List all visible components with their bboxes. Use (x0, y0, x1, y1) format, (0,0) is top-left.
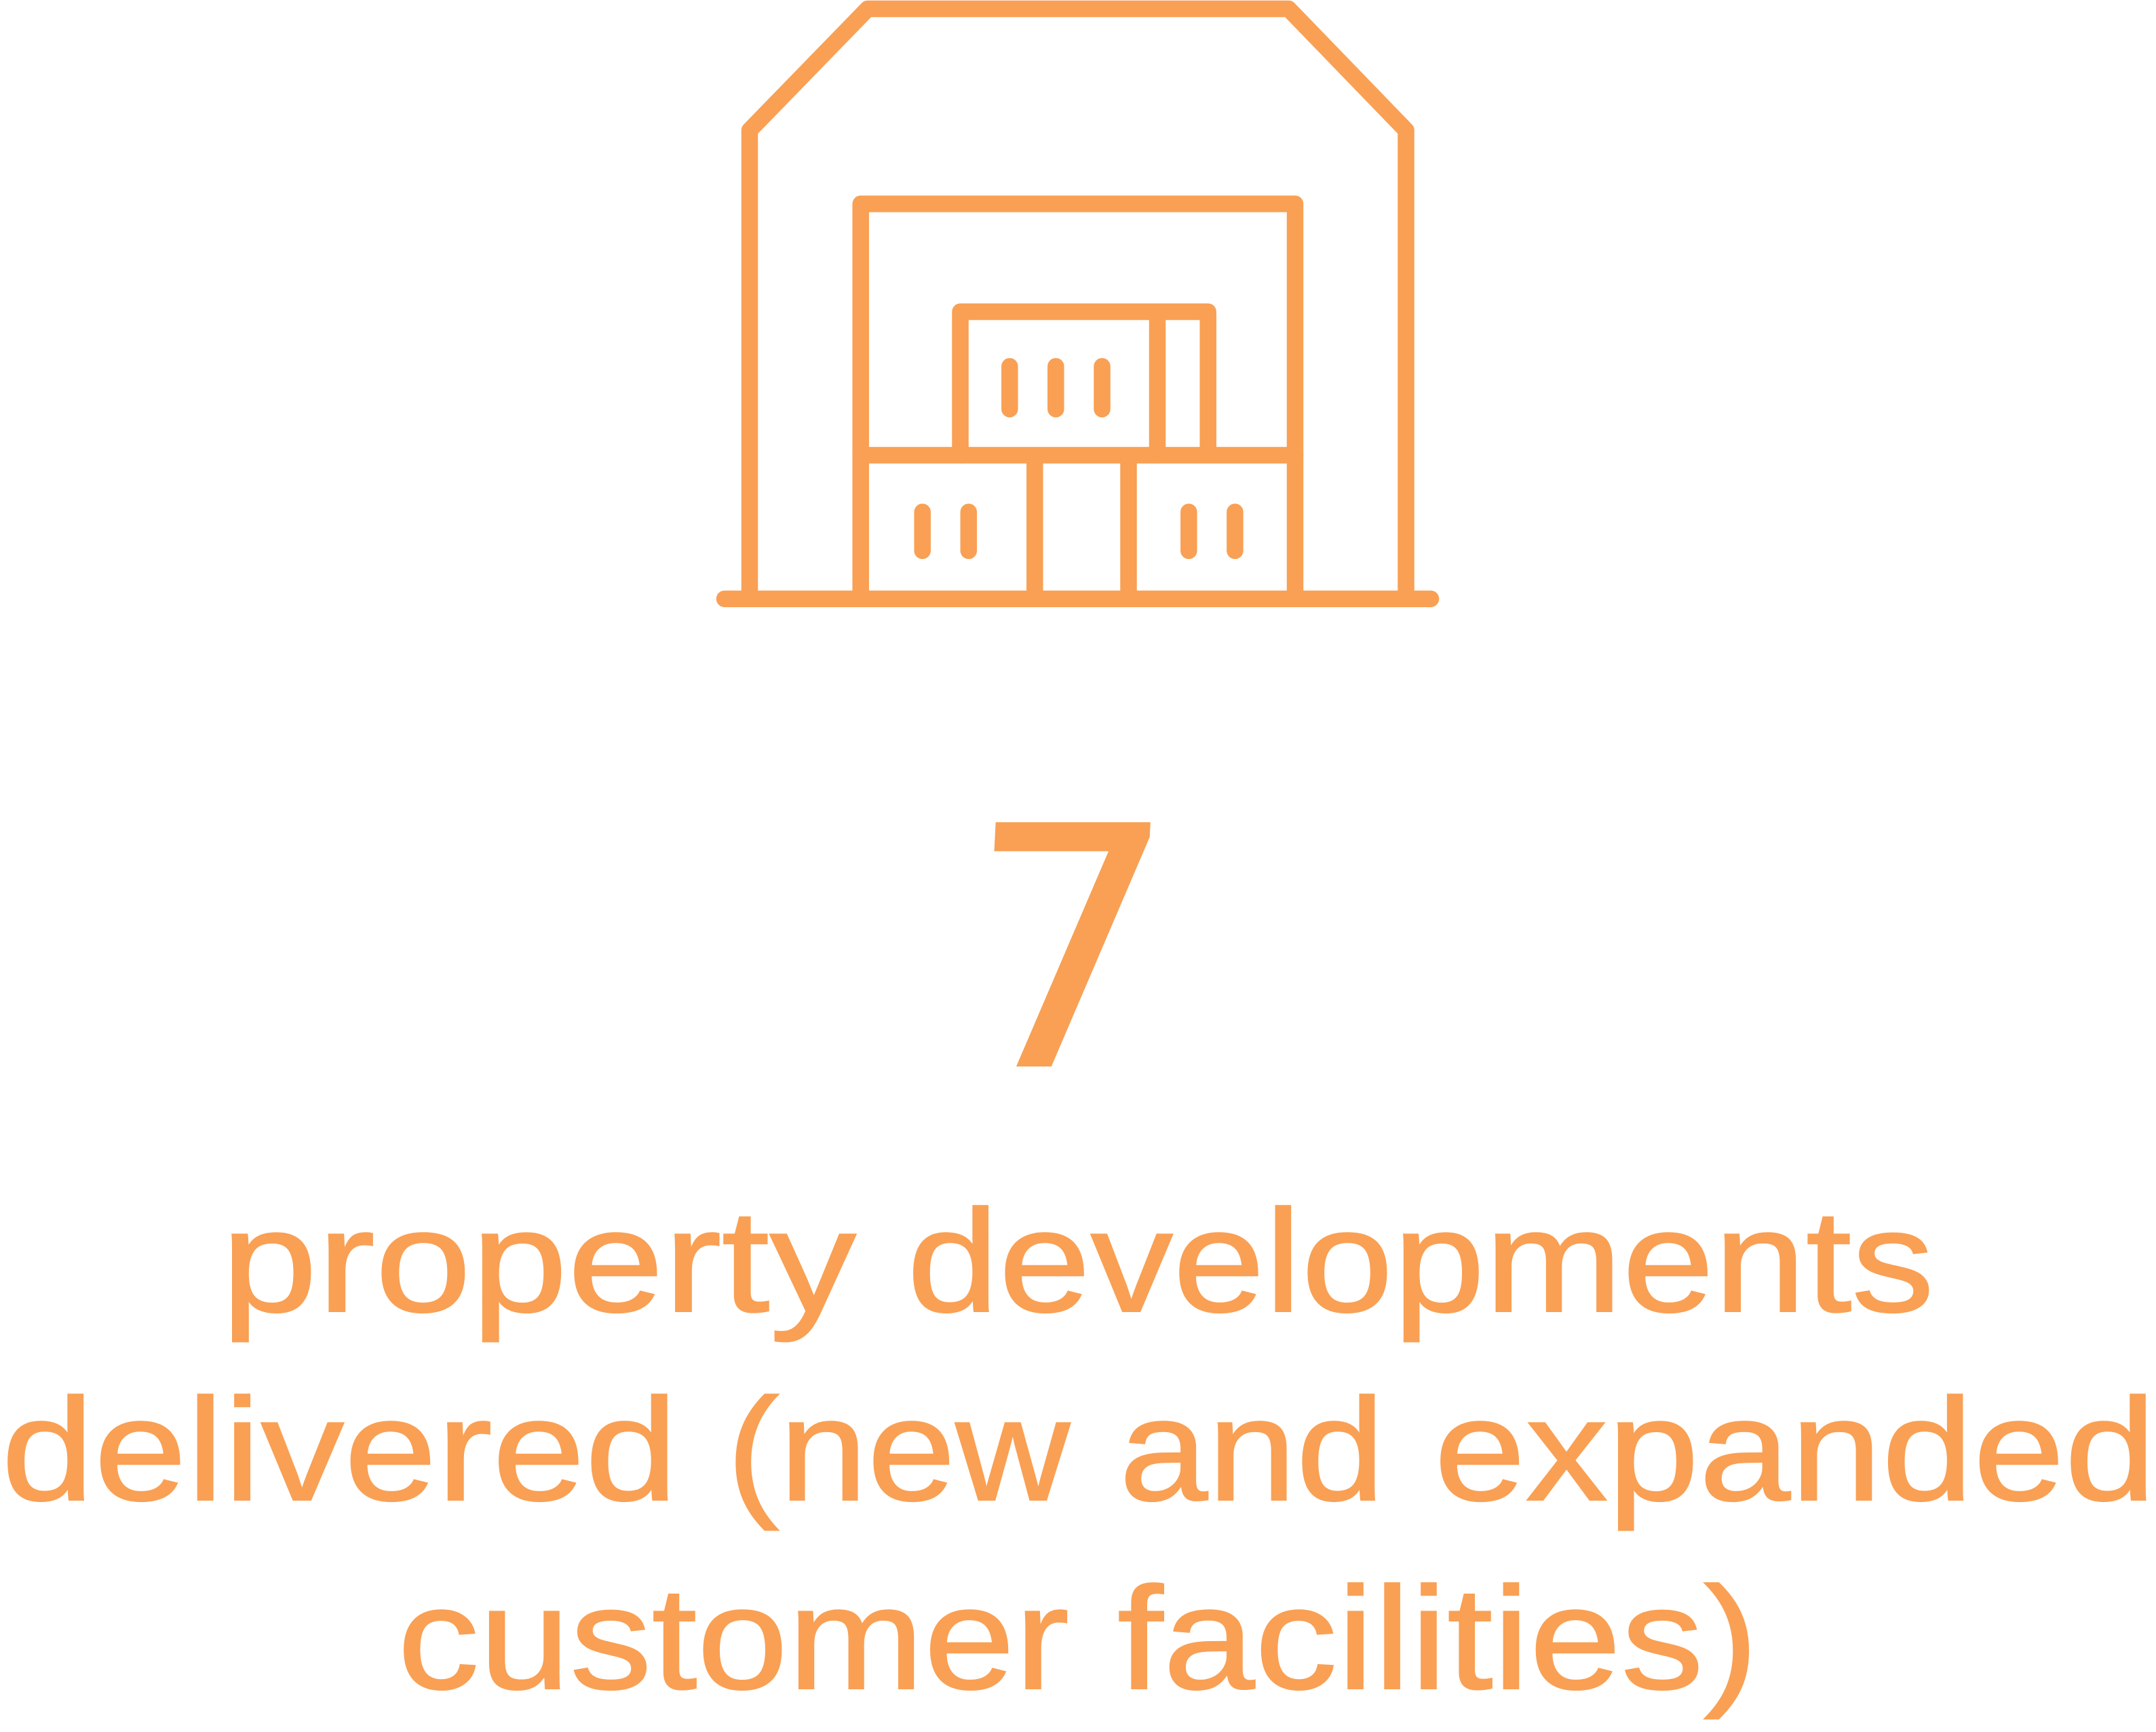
caption line 2: expanded (1434, 1368, 2156, 1531)
caption text (1, 1179, 2156, 1720)
caption line 2: delivered (1, 1368, 678, 1531)
caption line 3 (398, 1556, 1758, 1720)
caption line 2: and (1119, 1368, 1385, 1531)
caption line 1: developments (907, 1179, 1934, 1343)
icon part: shelf line and lower boxes (861, 455, 1295, 598)
icon part: upper box (961, 312, 1208, 455)
caption line 1: property (221, 1179, 857, 1343)
caption line 1 (221, 1179, 1934, 1343)
caption line 3: customer (398, 1556, 1069, 1720)
big number: 7 (953, 756, 1181, 1144)
icon part: floor line (725, 590, 1431, 607)
icon part: lower box ticks (923, 512, 1235, 551)
caption line 2: (new (727, 1368, 1071, 1531)
icon part: upper box ticks (1009, 366, 1102, 409)
icon part: warehouse door frame (861, 204, 1295, 598)
icon part: warehouse outline (750, 9, 1406, 598)
caption line 2 (1, 1368, 2156, 1531)
icon: warehouse with stacked boxes (725, 9, 1431, 599)
caption line 3: facilities) (1117, 1556, 1758, 1720)
